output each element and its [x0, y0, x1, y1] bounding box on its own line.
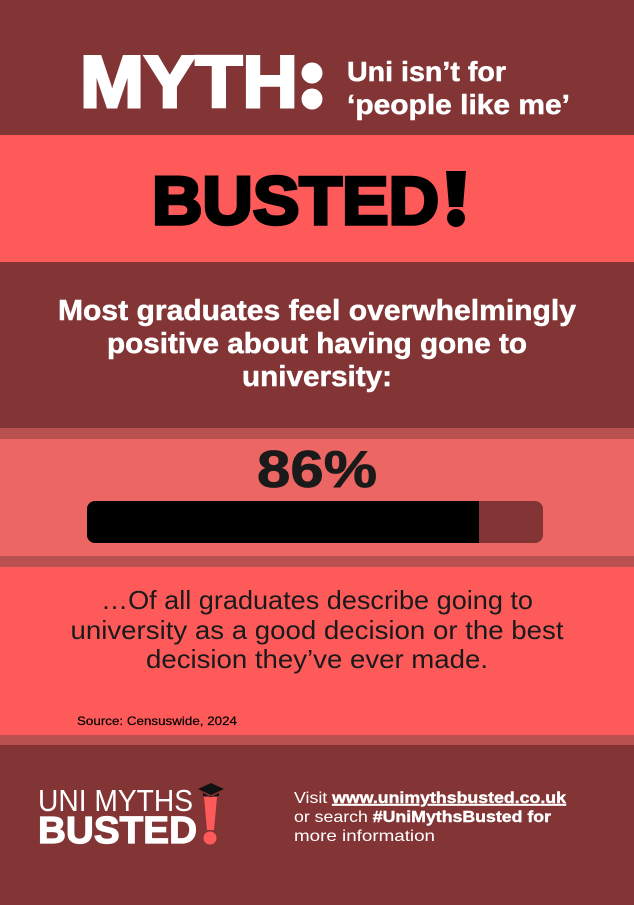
panel: busted banner — [0, 135, 634, 262]
divider band — [0, 735, 634, 745]
contact text: more information — [294, 828, 435, 845]
myth statement: Uni isn’t for — [347, 56, 506, 87]
icon: graduation cap — [198, 783, 224, 797]
panel: statistic — [0, 428, 634, 567]
logo: Uni Myths Busted: UNI MYTHS — [38, 783, 193, 818]
icon: exclamation mark — [446, 171, 466, 227]
logo: Uni Myths Busted — [38, 783, 224, 852]
finding text — [58, 295, 576, 393]
finding text: university: — [242, 361, 392, 393]
source note: Source: Censuswide, 2024 — [77, 714, 237, 728]
myth statement: ‘people like me’ — [347, 89, 570, 120]
statistic: 86%: 86% — [257, 441, 377, 499]
icon: colon — [302, 62, 322, 110]
finding text: Most graduates feel overwhelmingly — [58, 295, 576, 327]
progress bar: 86 percent — [87, 501, 543, 543]
explanation text: …Of all graduates describe going to — [101, 585, 533, 615]
myth statement — [347, 56, 570, 120]
logo: Uni Myths Busted: BUSTED — [38, 810, 197, 852]
contact text: Visit www.unimythsbusted.co.uk — [294, 790, 566, 807]
heading: BUSTED: BUSTED — [152, 163, 439, 239]
icon: pink exclamation — [204, 797, 217, 844]
contact text — [294, 790, 566, 845]
panel: footer — [0, 745, 634, 905]
panel: finding statement — [0, 262, 634, 428]
explanation text: university as a good decision or the best — [70, 615, 564, 645]
heading: MYTH: MYTH — [80, 42, 298, 123]
finding text: positive about having gone to — [107, 328, 527, 360]
panel: myth header — [0, 0, 634, 135]
contact text: or search #UniMythsBusted for — [294, 809, 551, 826]
explanation text — [70, 585, 564, 674]
explanation text: decision they’ve ever made. — [146, 644, 488, 674]
panel: explanation — [0, 567, 634, 735]
